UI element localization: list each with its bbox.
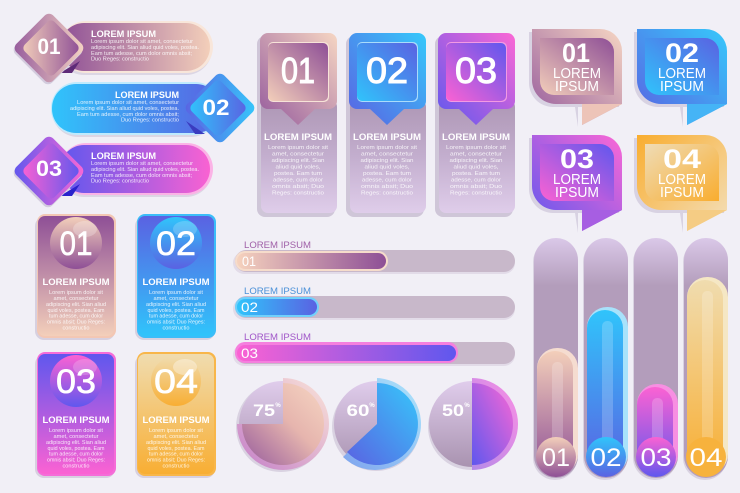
pie chart 75%: %: [275, 403, 281, 409]
panel: circle card 04: adipiscing elit. Sian aliud: [146, 440, 206, 446]
progress bar 01: [233, 240, 515, 274]
panel: tall card 01: omnis absit; Duo: [272, 184, 324, 190]
vertical bar 04: 04: [690, 444, 723, 472]
panel: tall card 01: [257, 33, 337, 217]
panel: tall card 03: LOREM IPSUM: [442, 132, 510, 143]
panel: circle card 01: omnis absit; Duo Reges:: [47, 320, 105, 326]
panel: banner 02: [51, 71, 257, 145]
icon: diamond 03: [11, 134, 86, 210]
panel: circle card 01: quid voles, postea. Eam: [48, 308, 105, 314]
panel: circle card 03: tum adesse, cum dolor: [49, 452, 103, 458]
panel: circle card 03: amet, consectetur: [54, 434, 99, 440]
panel: circle card 04: Lorem ipsum dolor sit: [149, 428, 203, 434]
text: banner 01 copy: [91, 29, 199, 62]
progress bar 03: [233, 332, 515, 366]
panel: tall card 02: Reges: constructio: [361, 190, 413, 196]
panel: circle card 02: tum adesse, cum dolor: [149, 314, 203, 320]
panel: tall card 03: aliud quid voles,: [454, 164, 499, 170]
progress bar 03: LOREM IPSUM: [244, 332, 311, 343]
panel: speech bubble 01: IPSUM: [555, 78, 599, 95]
panel: speech bubble 03: [529, 135, 622, 233]
panel: tall card 03: adesse, cum dolor: [451, 178, 501, 184]
panel: tall card 01: LOREM IPSUM: [264, 132, 332, 143]
panel: tall card 02: [346, 33, 426, 217]
panel: circle card 03: quid voles, postea. Eam: [48, 446, 105, 452]
panel: circle card 02: omnis absit; Duo Reges:: [147, 320, 205, 326]
text: banner 02 copy: Lorem ipsum dolor sit amet, consectetur: [77, 100, 179, 106]
panel: speech bubble 04: 04: [663, 144, 701, 174]
panel: tall card 02: amet, consectetur: [361, 152, 413, 158]
pie chart 60%: [332, 378, 421, 471]
icon: diamond 02: 02: [202, 95, 230, 120]
panel: speech bubble 02: IPSUM: [660, 78, 704, 95]
panel: circle card 03: 03: [56, 363, 96, 401]
text: banner 01 copy: LOREM IPSUM: [91, 29, 156, 40]
panel: circle card 02: amet, consectetur: [154, 296, 199, 302]
progress bar 03: 03: [241, 345, 258, 361]
text: banner 03 copy: adipiscing elit. Sian aliud quid voles, postea.: [91, 167, 199, 173]
text: banner 03 copy: [91, 151, 199, 184]
progress bar 02: 02: [241, 299, 258, 315]
text: banner 03 copy: Eam tum adesse, cum dolor omnis absit;: [91, 173, 192, 179]
icon: diamond 02: [183, 71, 257, 145]
pie chart 60%: 60: [346, 401, 370, 420]
panel: speech bubble 02: 02: [665, 38, 699, 68]
panel: circle card 01: [35, 214, 116, 340]
vertical bar 01: [533, 238, 578, 480]
panel: tall card 02: 02: [366, 50, 408, 91]
panel: speech bubble 03: 03: [560, 144, 594, 174]
progress bar 01: LOREM IPSUM: [244, 240, 311, 251]
text: banner 02 copy: Eam tum adesse, cum dolor omnis absit;: [77, 112, 179, 118]
panel: speech bubble 04: [634, 135, 727, 233]
text: banner 01 copy: Eam tum adesse, cum dolor omnis absit;: [91, 51, 192, 57]
panel: circle card 02: [135, 214, 216, 340]
panel: tall card 01: adipiscing elit. Sian: [272, 158, 324, 164]
panel: circle card 03: LOREM IPSUM: [42, 415, 110, 426]
panel: circle card 04: tum adesse, cum dolor: [149, 452, 203, 458]
panel: tall card 01: aliud quid voles,: [276, 164, 321, 170]
panel: speech bubble 01: LOREM: [553, 65, 601, 82]
text: banner 01 copy: adipiscing elit. Sian aliud quid voles, postea.: [91, 45, 199, 51]
panel: tall card 02: adesse, cum dolor: [362, 178, 412, 184]
panel: circle card 01: amet, consectetur: [54, 296, 99, 302]
panel: tall card 03: 03: [455, 50, 497, 91]
vertical bar 03: [633, 238, 678, 480]
text: banner 03 copy: Lorem ipsum dolor sit amet, consectetur: [91, 161, 193, 167]
progress bar 02: LOREM IPSUM: [244, 286, 311, 297]
panel: circle card 03: [35, 352, 116, 478]
panel: tall card 03: amet, consectetur: [450, 152, 502, 158]
panel: circle card 01: constructio: [62, 326, 90, 332]
text: banner 03 copy: LOREM IPSUM: [91, 151, 156, 162]
panel: banner 01: [11, 11, 213, 87]
vertical bar 04: [683, 238, 728, 480]
panel: circle card 03: constructio: [62, 464, 90, 470]
panel: speech bubble 04: LOREM: [658, 171, 706, 188]
panel: tall card 03: omnis absit; Duo: [450, 184, 502, 190]
panel: circle card 01: LOREM IPSUM: [42, 277, 110, 288]
icon: diamond 01: 01: [38, 34, 60, 59]
vertical bar 02: [583, 238, 628, 480]
panel: speech bubble 02: LOREM: [658, 65, 706, 82]
panel: tall card 02: aliud quid voles,: [364, 164, 410, 170]
pie chart 75%: [236, 378, 329, 472]
panel: circle card 04: quid voles, postea. Eam: [148, 446, 205, 452]
panel: tall card 03: [435, 33, 515, 217]
vertical bar 01: 01: [542, 444, 570, 472]
pie chart 75%: 75: [253, 401, 275, 420]
panel: circle card 02: 02: [156, 225, 196, 263]
pie chart 60%: %: [369, 403, 375, 409]
progress bar 02: [233, 286, 515, 320]
panel: circle card 04: [135, 352, 216, 478]
panel: circle card 03: Lorem ipsum dolor sit: [49, 428, 103, 434]
panel: circle card 03: adipiscing elit. Sian aliud: [46, 440, 106, 446]
panel: tall card 03: postea. Eam tum: [452, 171, 500, 177]
pie chart 50%: %: [464, 403, 470, 409]
pie chart 50%: 50: [442, 401, 464, 420]
panel: tall card 01: 01: [281, 50, 315, 91]
panel: tall card 01: Reges: constructio: [272, 190, 324, 196]
panel: speech bubble 01: [529, 29, 622, 127]
text: banner 02 copy: [70, 90, 179, 124]
panel: circle card 01: adipiscing elit. Sian aliud: [46, 302, 106, 308]
panel: tall card 02: LOREM IPSUM: [353, 132, 421, 143]
panel: circle card 01: tum adesse, cum dolor: [49, 314, 103, 320]
panel: tall card 03: Reges: constructio: [450, 190, 502, 196]
panel: tall card 01: adesse, cum dolor: [273, 178, 323, 184]
panel: circle card 04: omnis absit; Duo Reges:: [147, 458, 205, 464]
panel: tall card 02: adipiscing elit. Sian: [360, 158, 414, 164]
vertical bar 02: 02: [590, 444, 622, 472]
panel: circle card 02: LOREM IPSUM: [142, 277, 210, 288]
text: banner 01 copy: Lorem ipsum dolor sit amet, consectetur: [91, 39, 193, 45]
text: banner 02 copy: LOREM IPSUM: [115, 90, 179, 101]
panel: speech bubble 01: 01: [562, 38, 590, 68]
panel: tall card 02: postea. Eam tum: [363, 171, 411, 177]
panel: circle card 02: constructio: [162, 326, 190, 332]
panel: speech bubble 04: IPSUM: [660, 184, 704, 201]
progress bar 01: 01: [242, 253, 256, 269]
panel: banner 03: [11, 134, 213, 210]
text: banner 01 copy: Duo Reges: constructio: [91, 56, 149, 62]
panel: tall card 03: adipiscing elit. Sian: [450, 158, 502, 164]
panel: circle card 04: LOREM IPSUM: [142, 415, 210, 426]
text: banner 02 copy: Duo Reges: constructio: [121, 118, 179, 124]
panel: circle card 02: adipiscing elit. Sian aliud: [146, 302, 206, 308]
panel: circle card 04: amet, consectetur: [154, 434, 199, 440]
panel: tall card 01: amet, consectetur: [272, 152, 324, 158]
panel: speech bubble 02: [634, 29, 727, 127]
panel: speech bubble 03: IPSUM: [555, 184, 599, 201]
panel: circle card 02: Lorem ipsum dolor sit: [149, 290, 203, 296]
panel: circle card 01: Lorem ipsum dolor sit: [49, 290, 103, 296]
panel: tall card 01: Lorem ipsum dolor sit: [268, 145, 328, 151]
vertical bar 03: 03: [640, 444, 672, 472]
panel: circle card 04: 04: [154, 363, 198, 401]
text: banner 02 copy: adipiscing elit. Sian aliud quid voles, postea.: [70, 106, 179, 112]
panel: circle card 01: 01: [60, 225, 92, 263]
panel: circle card 04: constructio: [162, 464, 190, 470]
panel: circle card 02: quid voles, postea. Eam: [148, 308, 205, 314]
text: banner 03 copy: Duo Reges: constructio: [91, 178, 149, 184]
panel: speech bubble 03: LOREM: [553, 171, 601, 188]
pie chart 50%: [428, 378, 518, 470]
panel: circle card 03: omnis absit; Duo Reges:: [47, 458, 105, 464]
panel: tall card 01: postea. Eam tum: [274, 171, 322, 177]
icon: diamond 01: [11, 11, 86, 87]
panel: tall card 02: Lorem ipsum dolor sit: [357, 145, 417, 151]
panel: tall card 03: Lorem ipsum dolor sit: [446, 145, 506, 151]
icon: diamond 03: 03: [36, 156, 62, 181]
panel: tall card 02: omnis absit; Duo: [361, 184, 413, 190]
